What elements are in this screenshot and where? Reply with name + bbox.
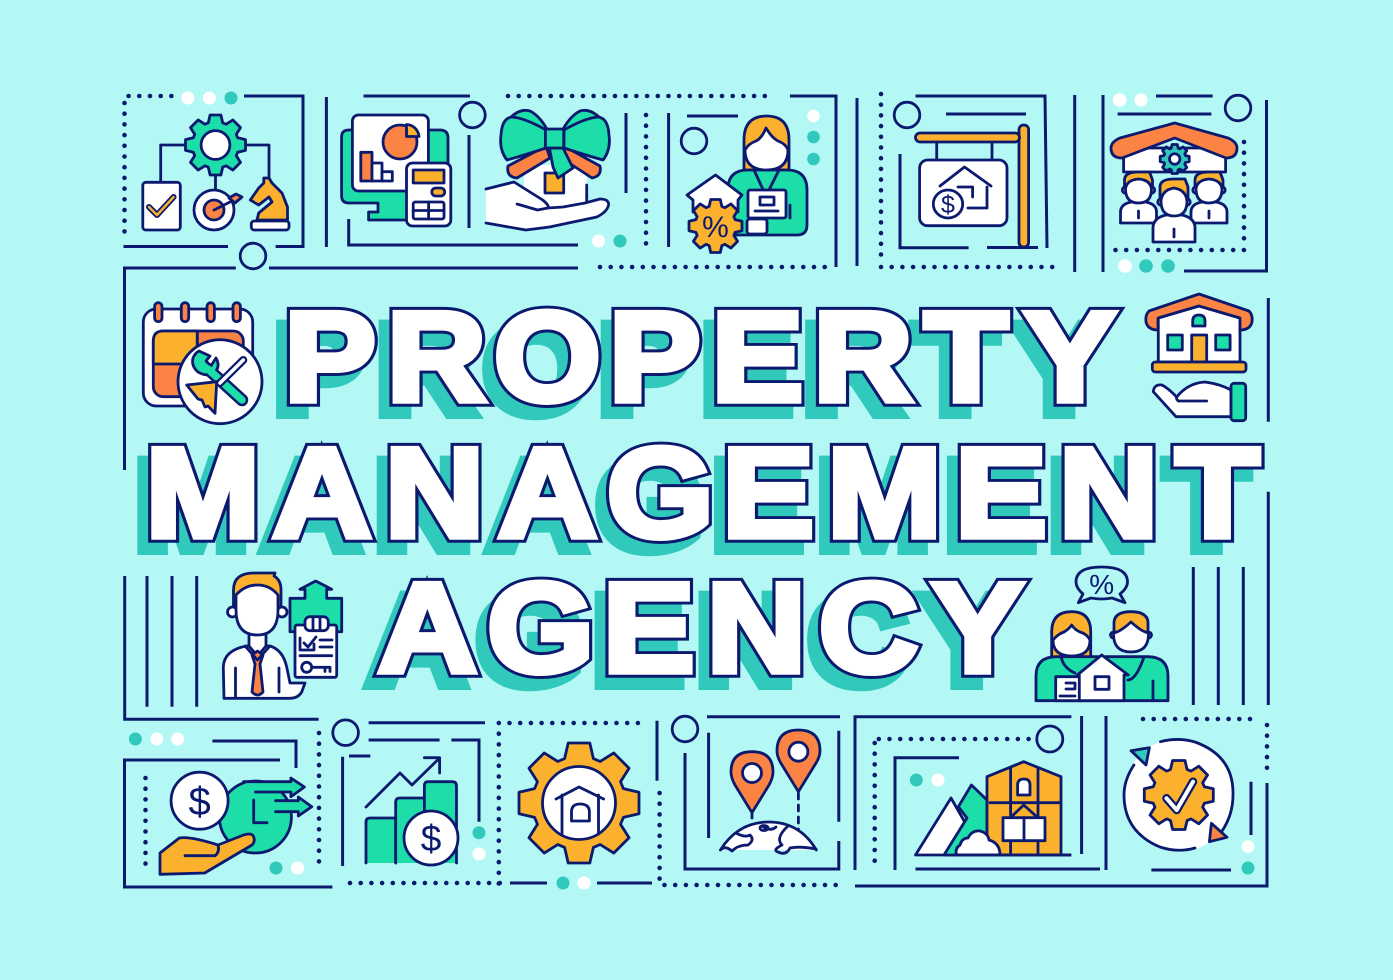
dollar coin bbox=[171, 772, 228, 829]
decorative circles and dots bbox=[129, 92, 1254, 890]
pin one bbox=[731, 752, 773, 818]
icon: financial report with calculator bbox=[342, 115, 451, 226]
paper bbox=[1056, 677, 1081, 701]
icon: hanging property sign bbox=[916, 125, 1029, 247]
roof bbox=[1111, 123, 1237, 158]
icon: hand holding gift house bbox=[486, 110, 609, 230]
icon: calendar with repair tools bbox=[143, 303, 262, 424]
icon: map pins over globe bbox=[720, 730, 820, 853]
right person bbox=[1191, 172, 1227, 223]
icon: agent woman with house and percent gear bbox=[687, 116, 807, 252]
title outline: AGENCY bbox=[378, 557, 1023, 699]
pin two bbox=[777, 730, 820, 830]
strategy gear bbox=[186, 115, 246, 175]
title outline bbox=[146, 286, 1259, 699]
couple bbox=[1036, 612, 1168, 701]
house bbox=[1077, 655, 1128, 701]
percent gear: % bbox=[702, 211, 729, 244]
speech bubble: % bbox=[1089, 569, 1114, 600]
icon: house on hand bbox=[1146, 294, 1252, 421]
target bbox=[194, 190, 242, 230]
green circle bbox=[219, 781, 291, 853]
ribbon tails bbox=[508, 146, 600, 178]
wrench bbox=[193, 351, 242, 400]
broom bbox=[187, 360, 243, 413]
title outline: PROPERTY bbox=[284, 286, 1116, 428]
trend arrow bbox=[366, 758, 440, 807]
bow bbox=[501, 110, 609, 178]
calculator bbox=[406, 163, 451, 226]
icon: money exchange in hand bbox=[160, 772, 312, 874]
house bbox=[687, 175, 742, 212]
pie chart bbox=[383, 124, 419, 159]
title bbox=[135, 286, 1259, 712]
house and dollar: $ bbox=[941, 191, 955, 219]
icon: couple with house and percent bubble bbox=[1036, 567, 1168, 701]
icon: team under roof with gear bbox=[1111, 123, 1237, 242]
calendar bbox=[143, 303, 253, 406]
green house bbox=[290, 581, 342, 632]
white circle bbox=[1124, 738, 1234, 852]
sign board bbox=[920, 160, 1007, 226]
icon: gear with house bbox=[519, 743, 639, 863]
barn bbox=[987, 762, 1061, 855]
title fill bbox=[146, 286, 1259, 699]
hand bbox=[1153, 382, 1246, 421]
hand bbox=[160, 834, 254, 874]
house bbox=[524, 165, 587, 210]
title fill: AGENCY bbox=[378, 557, 1023, 699]
title shadow: MANAGEMENT bbox=[135, 435, 1248, 577]
title shadow: AGENCY bbox=[367, 570, 1012, 712]
dollar coin: $ bbox=[188, 780, 211, 824]
title fill: MANAGEMENT bbox=[146, 422, 1259, 564]
title shadow bbox=[135, 299, 1248, 712]
woman bbox=[728, 116, 807, 235]
checklist bbox=[143, 182, 180, 230]
left person bbox=[1120, 172, 1156, 223]
mountains bbox=[916, 785, 987, 855]
bars bbox=[366, 782, 456, 863]
title shadow: PROPERTY bbox=[273, 299, 1105, 441]
orange arrowhead bbox=[1209, 823, 1227, 842]
house bbox=[1146, 294, 1252, 372]
checklist clipboard bbox=[295, 617, 337, 677]
title outline: MANAGEMENT bbox=[146, 422, 1259, 564]
chess knight bbox=[250, 178, 289, 230]
bar chart bbox=[361, 152, 392, 181]
cloud bbox=[956, 831, 1000, 855]
check gear bbox=[1144, 760, 1213, 830]
title fill: PROPERTY bbox=[284, 286, 1116, 428]
man bbox=[223, 573, 305, 698]
globe bbox=[720, 822, 816, 853]
hand bbox=[486, 182, 609, 230]
icon: check gear in cycle arrows bbox=[1124, 738, 1234, 852]
icon: barn with mountains bbox=[916, 762, 1071, 855]
arrows bbox=[244, 778, 312, 823]
post bbox=[916, 125, 1029, 247]
icon: manager with document and key bbox=[223, 573, 342, 698]
small gear bbox=[1160, 144, 1189, 174]
center person bbox=[1153, 179, 1195, 242]
dollar coin: $ bbox=[421, 818, 441, 859]
icon: strategy gear, target and chess knight bbox=[143, 115, 289, 230]
house outline bbox=[556, 787, 604, 834]
teal arrowhead bbox=[1131, 748, 1149, 765]
icon: rising bar chart with dollar bbox=[366, 758, 458, 865]
